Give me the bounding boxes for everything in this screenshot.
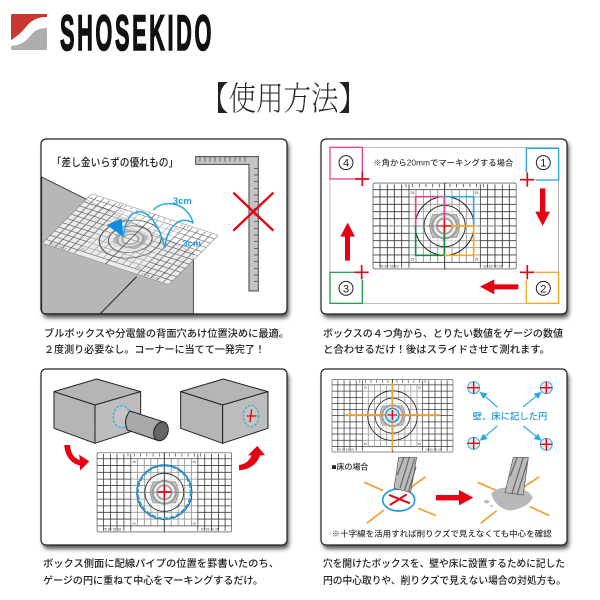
corner box 3 [330,272,362,303]
corner box 1 [526,148,559,180]
drill right [505,457,528,495]
panel 1 caption: ブルボックスや分電盤の背面穴あけ位置決めに最適。 [44,327,289,340]
grey wall and floor surface [42,177,193,314]
panel 2: marking from corners [321,139,569,318]
panel 3: box side marking [41,369,289,549]
ruler tick marks [200,157,258,282]
panel 3 caption [43,557,279,587]
corner box 1: 1 [540,158,546,170]
blue measuring arcs [123,204,193,248]
logo wordmark: SHOSEKIDO [60,6,214,62]
corner box 4 [330,147,362,179]
gauge [332,379,453,452]
orange lines left [364,477,436,523]
wall marks [468,382,552,450]
logo icon [11,14,47,50]
gauge sheet in perspective [42,193,219,285]
centre red cross [438,219,451,233]
panel 4 caption [323,557,566,587]
corner box 4: 4 [343,158,349,170]
gauge [97,452,232,532]
panel 4 caption: 穴を開けたボックスを、壁や床に設置するために記した [323,557,565,570]
thin frame [330,148,559,303]
panel 4 caption: 円の中心取りや、削りクズで見えない場合の対処方も。 [323,574,566,587]
blue floor circle [383,489,415,511]
gauge [373,183,516,269]
floor heading: ■床の場合 [332,462,368,472]
red X [389,494,410,505]
arrow down [535,188,550,226]
wall label: 壁、床に記した円 [473,410,547,421]
title: 【使用方法】 [201,81,366,118]
box with pipe [54,379,171,443]
drill left [394,457,417,492]
label 3cm top: 3cm [173,196,192,206]
arrow left [480,279,518,294]
panel 2 caption: と合わせるだけ！後はスライドさせて測れます。 [323,343,550,356]
arrow up [340,223,355,261]
box with marked centre [181,379,268,443]
centre circle [386,408,399,422]
coloured quadrant squares [416,197,474,255]
corner line [100,277,137,314]
steel square ruler [196,157,258,291]
blue leader arrows [481,393,541,440]
red cross mark [233,193,273,231]
corner box 2: 2 [540,283,546,295]
panel 2 caption [323,327,563,356]
panel 1 heading: 「差し金いらずの優れもの」 [52,156,178,169]
corner box 3: 3 [343,283,349,295]
curved arrow right [239,446,265,470]
panel 1: corner placement [41,139,289,318]
red crosshair marks [354,172,535,280]
blue pointer [107,218,123,237]
panel 2 note: ※角から20mmでマーキングする場合 [373,157,513,167]
dashed blue circle [138,465,191,519]
panel 1 caption [44,327,289,356]
corner box 2 [526,272,559,303]
panel 4 note: ※十字線を活用すれば削りクズで見えなくても中心を確認 [332,529,552,539]
debris pile [484,487,533,511]
red centre cross [158,485,171,499]
panel 1 caption: ２度測り必要なし。コーナーに当てて一発完了！ [44,343,265,356]
panel 3 caption: ゲージの円に重ねて中心をマーキングするだけ。 [43,574,263,587]
curved arrow left [64,445,89,471]
red arrow [436,490,473,505]
label 3cm right: 3cm [182,239,201,249]
panel 4: hole centring [321,369,569,549]
panel 2 caption: ボックスの４つ角から、とりたい数値をゲージの数値 [323,327,563,340]
panel 3 caption: ボックス側面に配線パイプの位置を罫書いたのち、 [43,557,279,570]
orange lines right [478,477,549,523]
orange crosshair [345,383,440,451]
